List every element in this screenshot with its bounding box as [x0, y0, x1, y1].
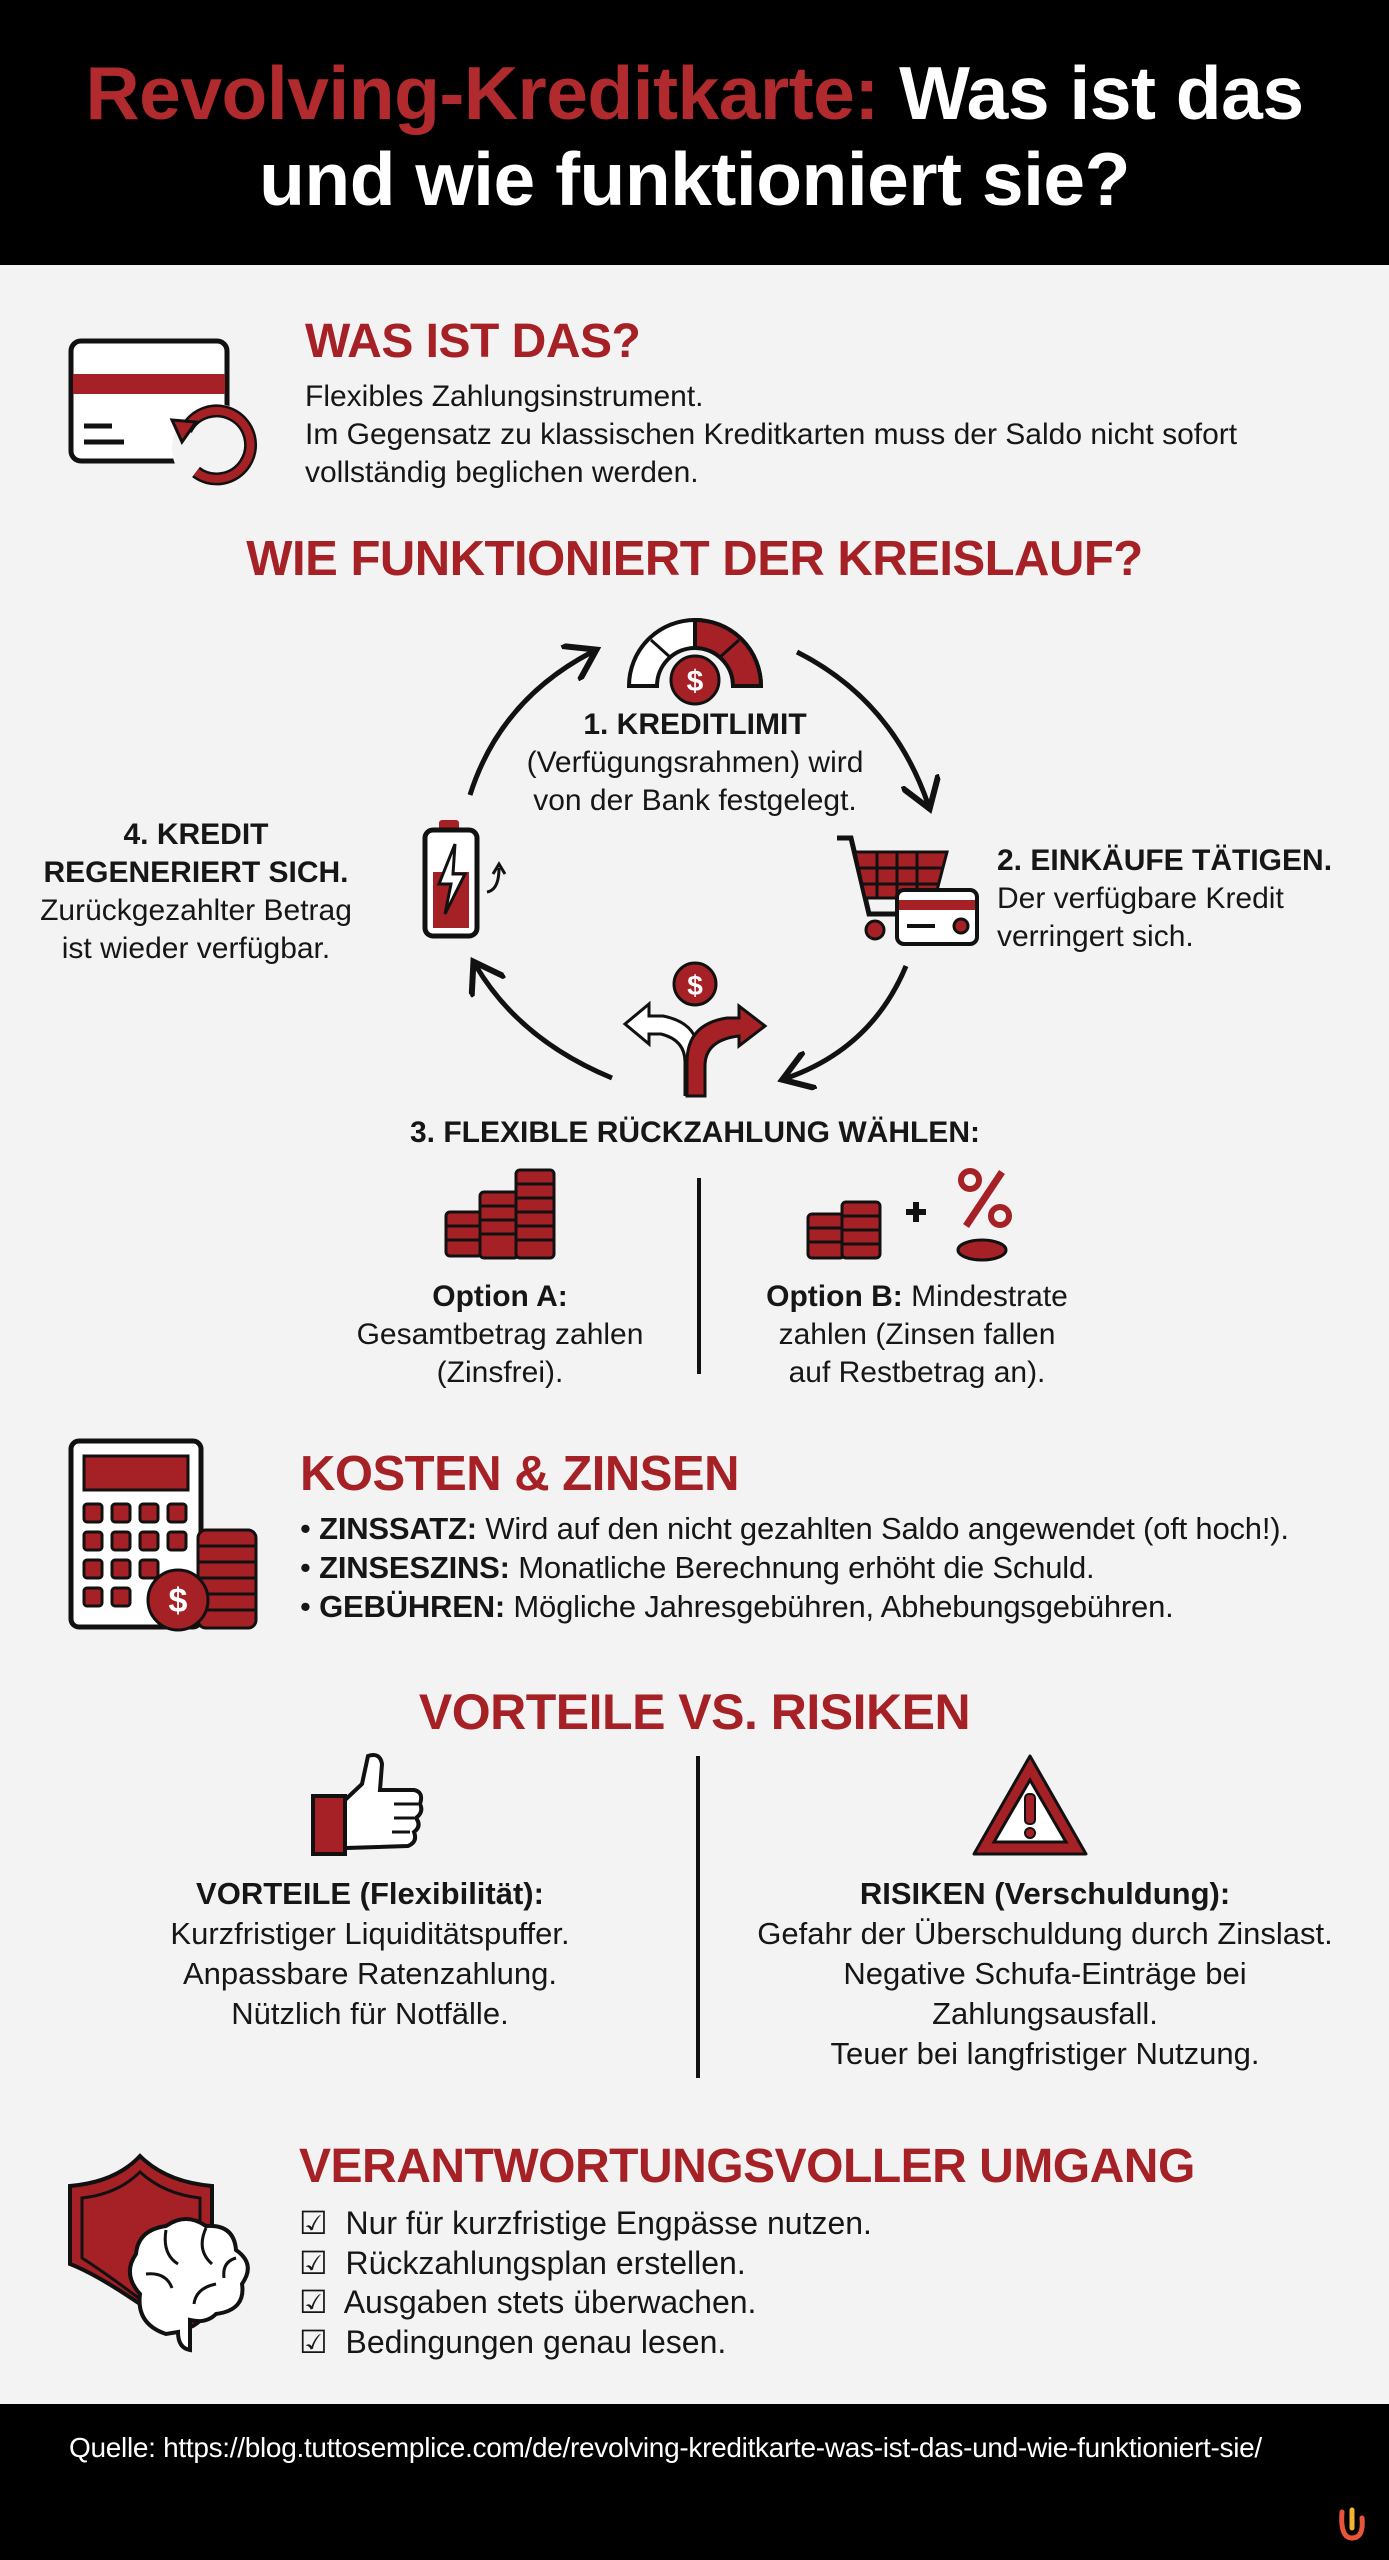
- step 2 text: verringert sich.: [997, 920, 1194, 953]
- step 2 text: 2. EINKÄUFE TÄTIGEN.: [997, 844, 1332, 877]
- step 1 text: (Verfügungsrahmen) wird: [527, 746, 863, 779]
- icon: shield with brain: [68, 2153, 250, 2352]
- icon: shopping cart with card: [837, 836, 979, 946]
- title: Revolving-Kreditkarte: Was ist das: [85, 51, 1304, 135]
- step 2 text: [997, 844, 1332, 953]
- section: verantwortungsvoller umgang: [299, 2140, 1195, 2360]
- list: cost bullets: [300, 1511, 1289, 1624]
- icon: coin stacks option A: [444, 1168, 556, 1260]
- pros text: Kurzfristiger Liquiditätspuffer.: [170, 1916, 570, 1951]
- list: cost bullets: • ZINSESZINS: Monatliche Berechnung erhöht die Schuld.: [300, 1550, 1094, 1585]
- pros text: VORTEILE (Flexibilität):: [196, 1876, 544, 1911]
- logo: [1339, 2508, 1365, 2540]
- text: definition: Im Gegensatz zu klassischen Kreditkarten muss der Saldo nicht sofort vollständig beglichen werden.: [305, 418, 1237, 489]
- checklist: ☑ Nur für kurzfristige Engpässe nutzen.: [299, 2205, 872, 2241]
- source text: Quelle: https://blog.tuttosemplice.com/de/revolving-kreditkarte-was-ist-das-und-wie-funktioniert-sie/: [69, 2432, 1262, 2463]
- section: was ist das: [305, 315, 1237, 489]
- heading: vorteile vs risiken: VORTEILE VS. RISIKEN: [419, 1684, 970, 1740]
- cons text: Zahlungsausfall.: [932, 1996, 1158, 2031]
- option B text: Option B: Mindestrate: [766, 1280, 1068, 1313]
- heading: kosten: KOSTEN & ZINSEN: [300, 1447, 739, 1501]
- step 1 text: von der Bank festgelegt.: [533, 784, 857, 817]
- checklist: ☑ Bedingungen genau lesen.: [299, 2324, 726, 2360]
- heading: was ist das: WAS IST DAS?: [305, 315, 640, 368]
- title: [85, 51, 1304, 221]
- option A text: Gesamtbetrag zahlen: [357, 1318, 643, 1351]
- icon: branching payment arrows: $: [687, 970, 703, 1001]
- list: cost bullets: • ZINSSATZ: Wird auf den nicht gezahlten Saldo angewendet (oft hoch!).: [300, 1511, 1289, 1546]
- cons text: Negative Schufa-Einträge bei: [843, 1956, 1247, 1991]
- footer: [0, 2404, 1389, 2560]
- icon: gauge credit limit: $: [687, 665, 704, 698]
- cons text: RISIKEN (Verschuldung):: [860, 1876, 1230, 1911]
- pros text: Anpassbare Ratenzahlung.: [183, 1956, 557, 1991]
- icon: warning triangle: [972, 1754, 1088, 1856]
- icon: coins plus percent option B: [806, 1168, 1012, 1262]
- step 1 text: [527, 708, 863, 817]
- icon: gauge credit limit: [627, 618, 763, 706]
- icon: branching payment arrows: [622, 962, 768, 1098]
- step 4 text: ist wieder verfügbar.: [62, 932, 330, 965]
- option B text: [766, 1280, 1068, 1389]
- cons text: [757, 1876, 1333, 2071]
- heading: umgang: VERANTWORTUNGSVOLLER UMGANG: [299, 2140, 1195, 2193]
- cycle arrows: [468, 643, 940, 1090]
- header banner: [0, 0, 1389, 265]
- icon: calculator with coins: [68, 1438, 258, 1632]
- option A text: Option A:: [432, 1280, 568, 1313]
- text: definition: Flexibles Zahlungsinstrument.: [305, 380, 704, 413]
- pros text: Nützlich für Notfälle.: [231, 1996, 509, 2031]
- option B text: zahlen (Zinsen fallen: [779, 1318, 1055, 1351]
- step 4 text: 4. KREDIT: [123, 818, 269, 851]
- option A text: [357, 1280, 643, 1389]
- step 4 text: [40, 818, 352, 965]
- option A text: (Zinsfrei).: [437, 1356, 563, 1389]
- divider pros cons: [696, 1756, 700, 2078]
- option B text: auf Restbetrag an).: [789, 1356, 1045, 1389]
- cons text: Teuer bei langfristiger Nutzung.: [830, 2036, 1260, 2071]
- icon: credit card with return arrow: [68, 338, 258, 486]
- step 4 text: REGENERIERT SICH.: [43, 856, 349, 889]
- cons text: Gefahr der Überschuldung durch Zinslast.: [757, 1916, 1333, 1951]
- section: kosten & zinsen: [300, 1447, 1289, 1624]
- icon: thumbs up: [311, 1753, 424, 1856]
- checklist: [299, 2205, 872, 2360]
- list: cost bullets: • GEBÜHREN: Mögliche Jahresgebühren, Abhebungsgebühren.: [300, 1589, 1174, 1624]
- step 3 heading: 3. FLEXIBLE RÜCKZAHLUNG WÄHLEN:: [410, 1116, 980, 1149]
- title: und wie funktioniert sie?: [259, 137, 1130, 221]
- icon: battery regenerating: [422, 820, 506, 938]
- heading: kreislauf: WIE FUNKTIONIERT DER KREISLAUF?: [246, 532, 1143, 586]
- text: definition: [305, 380, 1237, 489]
- checklist: ☑ Rückzahlungsplan erstellen.: [299, 2244, 746, 2280]
- step 2 text: Der verfügbare Kredit: [997, 882, 1284, 915]
- checklist: ☑ Ausgaben stets überwachen.: [299, 2284, 756, 2320]
- pros text: [170, 1876, 570, 2031]
- divider option: [697, 1178, 701, 1374]
- icon: calculator with coins: $: [169, 1582, 188, 1620]
- step 4 text: Zurückgezahlter Betrag: [40, 894, 352, 927]
- step 1 text: 1. KREDITLIMIT: [583, 708, 807, 741]
